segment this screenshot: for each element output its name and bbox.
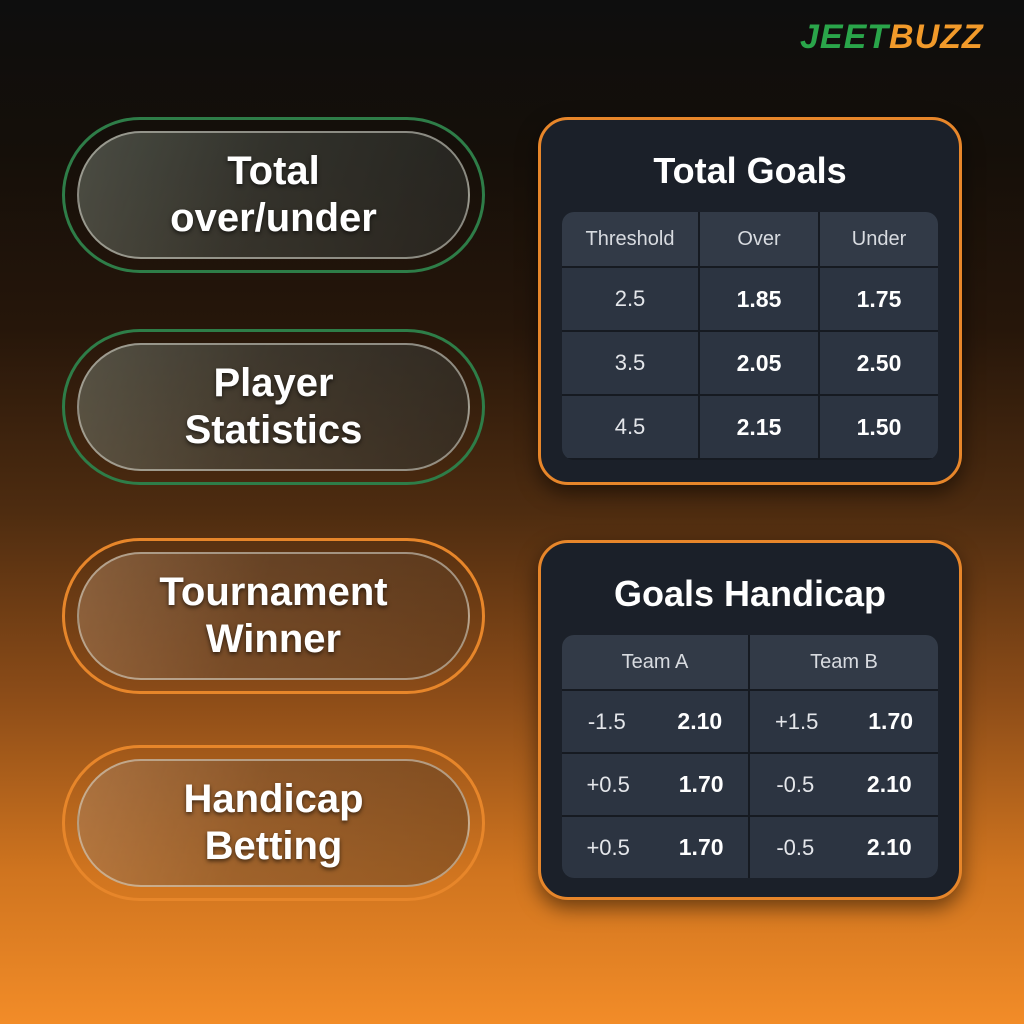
table: goals handicap: 1.70 bbox=[679, 834, 724, 860]
panel: total goals bbox=[538, 117, 962, 485]
table: total goals: Threshold bbox=[586, 228, 674, 250]
table: goals handicap: 2.10 bbox=[867, 834, 912, 860]
pill: total over/under bbox=[62, 117, 485, 273]
pill: handicap betting: Betting bbox=[205, 824, 342, 868]
table: goals handicap: Team A bbox=[622, 650, 688, 672]
table: goals handicap: 2.10 bbox=[867, 771, 912, 797]
heading: Goals Handicap bbox=[614, 573, 886, 614]
table: goals handicap: +1.5 bbox=[775, 708, 818, 734]
pill: total over/under: over/under bbox=[170, 196, 377, 240]
table: goals handicap: 1.70 bbox=[868, 708, 913, 734]
pill: tournament winner: Winner bbox=[206, 617, 341, 661]
pill: tournament winner: Tournament bbox=[159, 570, 388, 614]
logo: JEETBUZZ bbox=[800, 18, 984, 56]
table: goals handicap: Team B bbox=[810, 650, 878, 672]
table: total goals: 3.5 bbox=[615, 350, 645, 375]
table: total goals: 2.50 bbox=[857, 350, 901, 376]
pill: player statistics bbox=[62, 329, 485, 485]
table: goals handicap: +0.5 bbox=[586, 834, 630, 860]
table: goals handicap: 2.10 bbox=[677, 708, 722, 734]
table: goals handicap bbox=[562, 635, 938, 878]
table: goals handicap: 1.70 bbox=[679, 771, 724, 797]
pill: tournament winner bbox=[62, 538, 485, 694]
table: total goals bbox=[562, 212, 938, 460]
pill: player statistics: Statistics bbox=[185, 408, 362, 452]
panel: goals handicap bbox=[538, 540, 962, 900]
heading: Total Goals bbox=[653, 150, 847, 191]
pill: total over/under: Total bbox=[227, 149, 320, 193]
table: goals handicap: -0.5 bbox=[776, 834, 814, 860]
table: total goals: 1.50 bbox=[857, 414, 901, 440]
table: total goals: 2.15 bbox=[737, 414, 781, 440]
table: total goals: 1.75 bbox=[857, 286, 901, 312]
table: total goals: 4.5 bbox=[615, 414, 645, 439]
table: total goals: Under bbox=[852, 228, 906, 250]
table: total goals: 2.05 bbox=[737, 350, 781, 376]
pill: handicap betting bbox=[62, 745, 485, 901]
table: total goals: 1.85 bbox=[737, 286, 781, 312]
pill: player statistics: Player bbox=[213, 361, 334, 405]
table: total goals: 2.5 bbox=[615, 286, 645, 311]
table: total goals: Over bbox=[737, 228, 781, 250]
pill: handicap betting: Handicap bbox=[183, 777, 364, 821]
table: goals handicap: -1.5 bbox=[588, 708, 626, 734]
table: goals handicap: -0.5 bbox=[776, 772, 814, 796]
table: goals handicap: +0.5 bbox=[586, 772, 630, 796]
